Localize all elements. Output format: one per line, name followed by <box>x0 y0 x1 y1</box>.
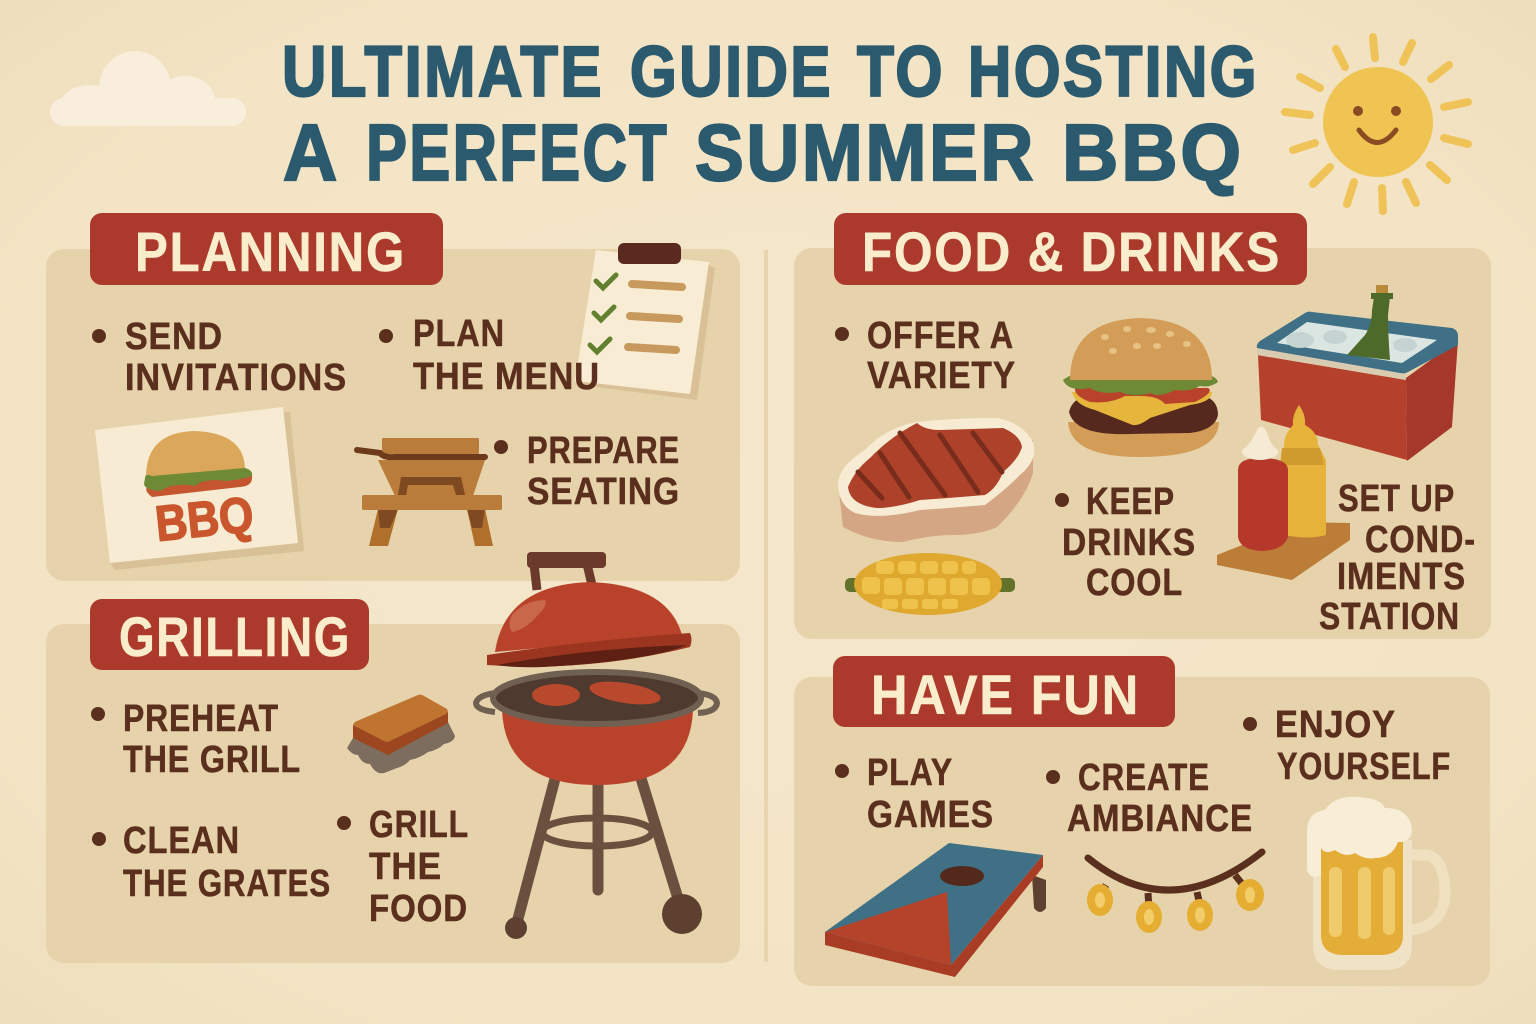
item: play games: PLAY <box>867 752 953 794</box>
item: set up condiments station: IMENTS <box>1337 556 1466 598</box>
divider <box>764 250 768 962</box>
item: offer a variety <box>835 315 1016 397</box>
item: keep drinks cool: KEEP <box>1086 481 1175 523</box>
item: grill the food: GRILL <box>369 804 469 846</box>
title: BBQ <box>1062 108 1244 197</box>
item: prepare seating <box>494 430 680 513</box>
icon: bbq invitation card <box>95 407 304 570</box>
panel: grilling <box>46 552 740 963</box>
item: prepare seating: SEATING <box>527 471 680 513</box>
panel: have fun <box>794 656 1490 986</box>
title <box>282 33 1259 197</box>
item: play games: GAMES <box>867 794 994 836</box>
heading: have fun: HAVE FUN <box>871 663 1140 726</box>
item: create ambiance: AMBIANCE <box>1067 798 1253 840</box>
icon: kettle grill <box>476 552 717 939</box>
item: grill the food: THE <box>369 846 442 888</box>
item: keep drinks cool <box>1055 481 1196 604</box>
item: plan the menu: THE MENU <box>413 356 600 398</box>
item: clean the grates <box>92 820 331 905</box>
icon: cornhole board <box>825 843 1046 977</box>
item: prepare seating: PREPARE <box>527 430 680 472</box>
panel: food and drinks <box>794 213 1491 639</box>
title: TO <box>857 33 945 112</box>
item: preheat the grill: THE GRILL <box>123 739 301 781</box>
icon: picnic table <box>357 438 502 546</box>
icon: bbq invitation card: BBQ <box>153 486 256 552</box>
item: enjoy yourself <box>1243 704 1451 788</box>
item: clean the grates: THE GRATES <box>123 863 331 905</box>
icon: string lights <box>1087 852 1264 933</box>
item: create ambiance <box>1046 757 1253 840</box>
icon: sun <box>1285 37 1468 211</box>
item: offer a variety: VARIETY <box>867 355 1016 397</box>
item: plan the menu: PLAN <box>413 313 505 355</box>
icon: condiments station <box>1217 405 1350 580</box>
icon: steak <box>838 418 1034 542</box>
item: preheat the grill: PREHEAT <box>123 698 279 740</box>
item: play games <box>835 752 994 836</box>
heading: food and drinks: FOOD & DRINKS <box>862 220 1281 283</box>
icon: beer mug <box>1307 797 1445 970</box>
title: PERFECT <box>366 108 669 197</box>
icon: cloud <box>50 51 246 126</box>
heading: grilling: GRILLING <box>119 605 351 668</box>
item: enjoy yourself: ENJOY <box>1275 704 1396 746</box>
item: grill the food <box>337 804 469 930</box>
title: ULTIMATE <box>282 33 604 112</box>
item: keep drinks cool: COOL <box>1086 562 1183 604</box>
item: offer a variety: OFFER A <box>867 315 1014 357</box>
panel: planning <box>46 213 740 581</box>
item: set up condiments station: SET UP <box>1338 478 1455 520</box>
title: A <box>283 108 340 197</box>
title: HOSTING <box>968 33 1259 112</box>
item: send invitations: SEND <box>125 316 223 358</box>
item: send invitations <box>92 316 347 399</box>
heading: planning: PLANNING <box>135 220 406 283</box>
item: grill the food: FOOD <box>369 888 468 930</box>
item: clean the grates: CLEAN <box>123 820 240 862</box>
title: SUMMER <box>695 108 1036 197</box>
item: keep drinks cool: DRINKS <box>1062 522 1196 564</box>
icon: burger <box>1063 318 1219 457</box>
item: plan the menu <box>379 313 600 398</box>
item: set up condiments station: COND- <box>1365 519 1476 561</box>
item: create ambiance: CREATE <box>1078 757 1210 799</box>
title: GUIDE <box>630 33 833 112</box>
icon: grill brush <box>347 695 455 773</box>
item: set up condiments station <box>1319 478 1476 638</box>
item: preheat the grill <box>91 698 301 781</box>
icon: cooler with bottle <box>1257 285 1458 461</box>
item: enjoy yourself: YOURSELF <box>1277 746 1451 788</box>
item: send invitations: INVITATIONS <box>125 357 347 399</box>
icon: checklist <box>575 243 715 400</box>
icon: corn <box>845 553 1015 615</box>
item: set up condiments station: STATION <box>1319 596 1460 638</box>
